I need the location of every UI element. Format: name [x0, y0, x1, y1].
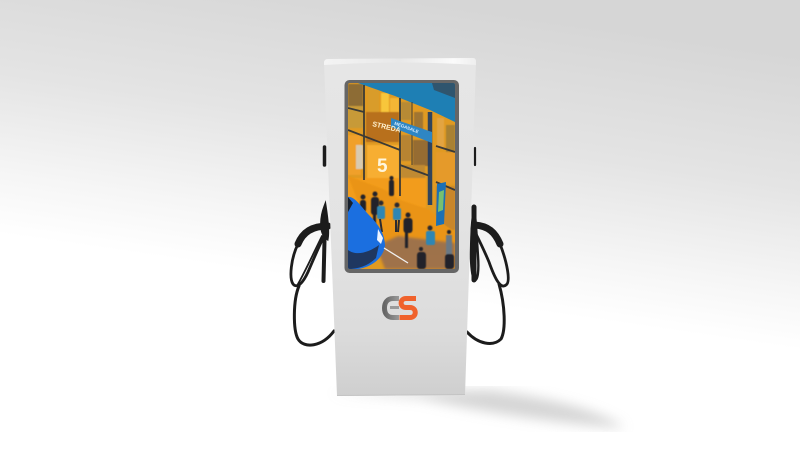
store name: STREDA [372, 121, 401, 134]
left lower cable loop [294, 286, 334, 345]
right holster [474, 148, 476, 165]
left handle thick neck [298, 226, 328, 244]
storefront [348, 83, 455, 269]
pedestrians [360, 176, 454, 269]
shopfront windows [348, 84, 455, 230]
store sign [391, 118, 432, 143]
store sign text: MEGASALE [394, 121, 419, 134]
glass canopy [358, 83, 455, 122]
screen bezel [344, 80, 459, 273]
floor shadow [330, 390, 625, 428]
big number: 5 [377, 156, 388, 177]
screen photo: shopping centre [348, 83, 455, 269]
left connector handle [322, 207, 327, 238]
mullions [348, 85, 455, 205]
logo S [400, 298, 416, 318]
top highlight [324, 58, 476, 65]
banner [436, 182, 446, 226]
logo E [384, 298, 399, 318]
mall paved floor [348, 176, 455, 269]
right lower cable loop [467, 284, 504, 343]
right connector handle [472, 207, 476, 280]
body shell [324, 58, 476, 396]
ES logo [384, 298, 416, 318]
base edge [337, 394, 465, 396]
charger body [324, 58, 476, 396]
logo E bar [390, 306, 399, 309]
blue car [348, 197, 385, 269]
road marking [384, 248, 408, 263]
left holster [323, 147, 326, 165]
cables and connectors [291, 147, 508, 345]
right handle thick neck [475, 225, 500, 244]
